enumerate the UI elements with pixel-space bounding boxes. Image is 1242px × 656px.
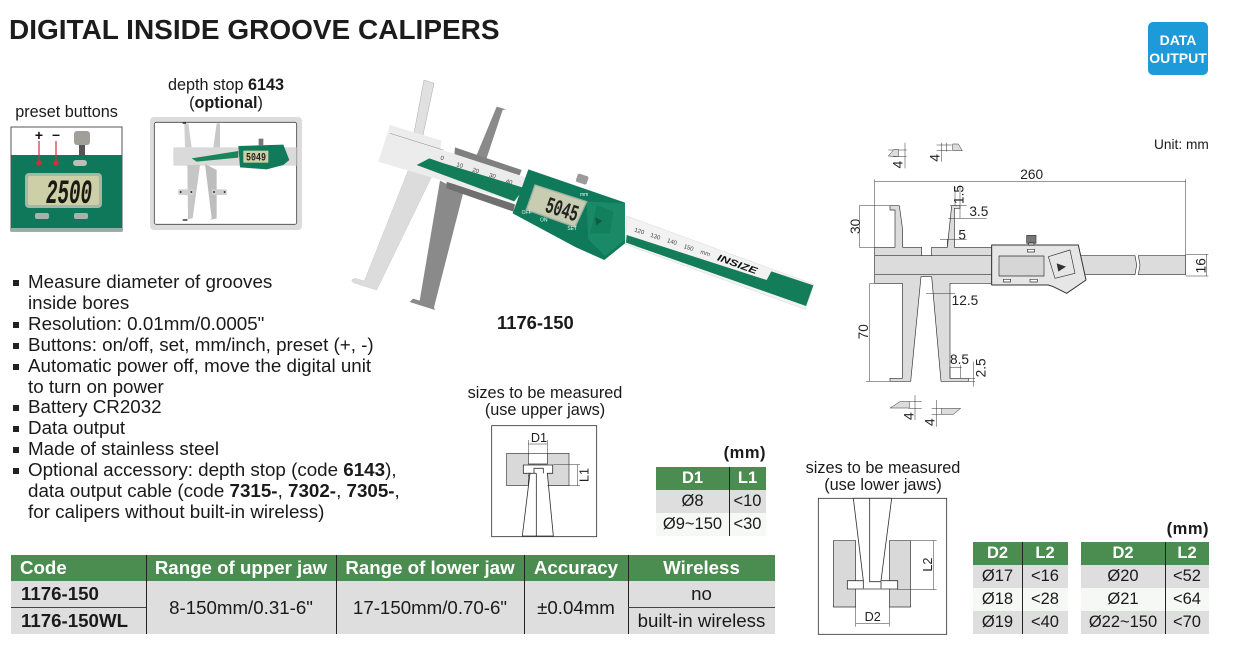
table: product codes: built-in wireless xyxy=(638,610,765,630)
table: product codes: 1176-150 xyxy=(21,583,99,604)
feature list: for calipers without built-in wireless) xyxy=(28,501,324,522)
dimension labels: 4 xyxy=(901,412,916,420)
feature list: Measure diameter of grooves xyxy=(28,271,272,292)
table: product codes: Range of lower jaw xyxy=(345,557,515,578)
table: product codes: 17-150mm/0.70-6" xyxy=(353,596,507,618)
main product photo: caliper: ON xyxy=(540,218,548,224)
feature list xyxy=(13,271,400,522)
table: D1 L1: L1 xyxy=(738,469,757,487)
table: D2 L2 short xyxy=(973,542,1068,634)
table: product codes: ±0.04mm xyxy=(537,596,615,618)
diagram: lower jaws: D2 xyxy=(865,610,881,624)
label: preset buttons: preset buttons xyxy=(15,103,118,121)
beam right xyxy=(1080,256,1137,275)
table: product codes: Accuracy xyxy=(534,557,618,578)
photo: preset buttons display xyxy=(10,126,122,232)
upper sliding jaw xyxy=(477,107,506,160)
badge: data output: DATA xyxy=(1160,32,1196,48)
feature list: Made of stainless steel xyxy=(28,438,219,459)
table: product codes: 8-150mm/0.31-6" xyxy=(169,596,313,618)
diagram: upper jaws: L1 xyxy=(578,468,592,482)
green scale xyxy=(417,158,524,201)
table unit: D2: (mm) xyxy=(1167,520,1209,538)
feature list: inside bores xyxy=(28,292,129,313)
table: D2 L2 long: Ø21 xyxy=(1107,590,1139,608)
photo: depth stop caliper: 5049 xyxy=(246,153,266,165)
photo: depth stop caliper xyxy=(150,117,302,230)
table: D2 L2 long: Ø22~150 xyxy=(1089,613,1157,631)
table: D2 L2 long: <52 xyxy=(1173,567,1201,585)
feature list: data output cable (code 7315-, 7302-, 7305-, xyxy=(28,480,400,501)
diagram: lower jaws: L2 xyxy=(921,558,935,572)
feature list: to turn on power xyxy=(28,376,164,397)
table: product codes: Wireless xyxy=(663,557,740,578)
table: D1 L1: Ø9~150 xyxy=(663,515,722,533)
dimension labels: 16 xyxy=(1193,258,1208,273)
upper fixed jaw xyxy=(414,80,434,137)
feature list: Battery CR2032 xyxy=(28,396,162,417)
main product photo: caliper: mm xyxy=(699,250,711,258)
main product photo: caliper xyxy=(352,80,814,310)
table: product codes: Code xyxy=(20,557,67,578)
main product photo: caliper: 140 xyxy=(666,238,678,247)
table: D2 L2 long: <70 xyxy=(1173,613,1201,631)
digital unit outline xyxy=(992,245,1086,293)
label: lower jaws diagram xyxy=(806,459,960,494)
label: upper jaws diagram xyxy=(468,384,622,418)
feature list: Data output xyxy=(28,417,125,438)
title: DIGITAL INSIDE GROOVE CALIPERS xyxy=(9,14,500,45)
table: D1 L1: Ø8 xyxy=(681,492,704,510)
dimension labels: 8.5 xyxy=(950,352,969,367)
main product photo: caliper: 130 xyxy=(649,233,661,242)
table: product codes xyxy=(11,555,775,634)
table: D2 L2 short: Ø18 xyxy=(982,590,1013,608)
badge: data output xyxy=(1148,22,1208,75)
dimension labels: 70 xyxy=(856,324,871,339)
badge: data output: OUTPUT xyxy=(1149,50,1207,66)
label: depth stop xyxy=(168,76,284,112)
diagram: upper jaws xyxy=(491,425,598,538)
table: D2 L2 short: <28 xyxy=(1031,590,1059,608)
label: upper jaws diagram: (use upper jaws) xyxy=(485,400,605,418)
table: D2 L2 short: <40 xyxy=(1031,613,1059,631)
main product photo: caliper: 120 xyxy=(633,228,645,237)
table: D2 L2 long: L2 xyxy=(1177,544,1197,562)
label: depth stop: (optional) xyxy=(189,94,263,112)
main product photo: caliper: 40 xyxy=(505,179,514,187)
table: D1 L1: <10 xyxy=(734,492,762,510)
table: D1 L1: <30 xyxy=(734,515,762,533)
table: product codes: 1176-150WL xyxy=(21,610,128,630)
digital unit xyxy=(513,169,625,260)
label: depth stop: depth stop 6143 xyxy=(168,76,284,94)
table: D2 L2 long: D2 xyxy=(1112,544,1134,562)
table: D2 L2 short: D2 xyxy=(987,544,1008,562)
table: product codes: no xyxy=(691,583,712,604)
section profiles xyxy=(888,144,962,414)
table: D1 L1: D1 xyxy=(682,469,703,487)
technical drawing xyxy=(848,142,1208,427)
right beam xyxy=(625,216,814,309)
feature list: Optional accessory: depth stop (code 6143), xyxy=(28,459,397,480)
table: D2 L2 long xyxy=(1081,542,1209,634)
model label: 1176-150 xyxy=(497,312,574,333)
lower sliding jaw xyxy=(410,181,463,310)
main product photo: caliper: 5045 xyxy=(542,194,581,229)
dimension labels: 4 xyxy=(927,154,942,162)
dimension labels: 30 xyxy=(848,218,863,234)
table: D2 L2 long: <64 xyxy=(1173,590,1201,608)
dimension lines xyxy=(859,143,1208,427)
main product photo: caliper: 150 xyxy=(683,244,695,253)
main product photo: caliper: 30 xyxy=(488,173,497,181)
dimension labels: 4 xyxy=(891,160,906,168)
feature list: Resolution: 0.01mm/0.0005" xyxy=(28,313,264,334)
dimension labels: 2.5 xyxy=(974,358,989,377)
unit note: Unit: mm xyxy=(1154,137,1209,152)
main product photo: caliper: SET xyxy=(567,226,577,232)
main product photo: caliper: 0 xyxy=(439,156,445,162)
jaws and body xyxy=(875,206,992,381)
table: D2 L2 short: Ø17 xyxy=(982,567,1013,585)
label: lower jaws diagram: (use lower jaws) xyxy=(824,476,942,494)
table: D2 L2 long: Ø20 xyxy=(1107,567,1139,585)
dimension labels: 4 xyxy=(923,418,938,426)
label: upper jaws diagram: sizes to be measured xyxy=(468,384,622,402)
main product photo: caliper: mm xyxy=(580,192,588,198)
fixed body xyxy=(378,125,527,202)
main product photo: caliper: OFF xyxy=(522,210,532,216)
table: D2 L2 short: <16 xyxy=(1031,567,1059,585)
feature list: Automatic power off, move the digital unit xyxy=(28,355,371,376)
brand logo text: INSIZE xyxy=(716,252,760,276)
feature list: Buttons: on/off, set, mm/inch, preset (+, -) xyxy=(28,334,374,355)
dimension labels: 5 xyxy=(958,227,966,242)
main product photo: caliper: 10 xyxy=(455,162,464,170)
label: lower jaws diagram: sizes to be measured xyxy=(806,459,960,477)
diagram: lower jaws xyxy=(818,498,948,635)
dimension labels: 12.5 xyxy=(952,293,979,308)
dimension labels: 260 xyxy=(1020,167,1043,182)
table: D1 L1 xyxy=(656,467,766,536)
dimension labels xyxy=(848,154,1208,426)
dimension labels: 1.5 xyxy=(951,185,966,204)
photo: preset buttons display: 2500 xyxy=(46,176,92,214)
table: product codes: Range of upper jaw xyxy=(155,557,327,578)
table: D2 L2 short: L2 xyxy=(1035,544,1055,562)
table: D2 L2 short: Ø19 xyxy=(982,613,1013,631)
photo: preset buttons display: + xyxy=(35,127,43,143)
LCD xyxy=(526,185,587,227)
main product photo: caliper: 20 xyxy=(471,168,480,176)
table unit: D1: (mm) xyxy=(724,444,766,462)
dimension labels: 3.5 xyxy=(969,204,989,219)
lower fixed jaw xyxy=(352,170,432,290)
photo: preset buttons display: – xyxy=(52,126,60,142)
diagram: upper jaws: D1 xyxy=(531,431,547,445)
